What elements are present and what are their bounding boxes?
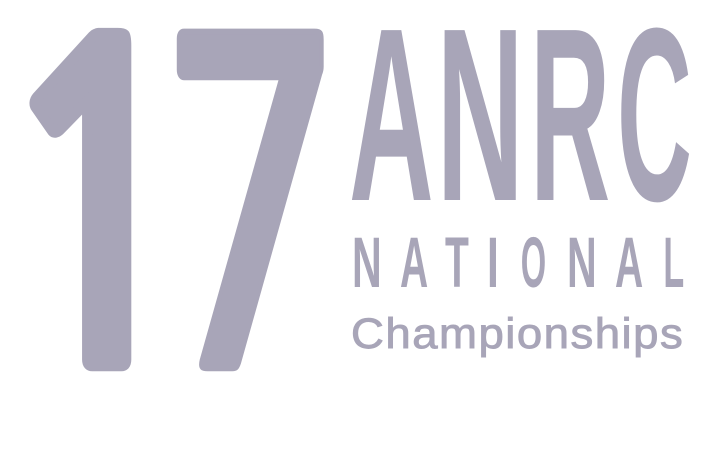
- numeral 17: [0, 0, 344, 433]
- heading: NATIONAL: N: [352, 223, 382, 303]
- heading: NATIONAL: I: [487, 224, 499, 303]
- heading: ANRC: [349, 0, 692, 253]
- heading: NATIONAL: N: [567, 223, 597, 303]
- heading: NATIONAL: L: [663, 223, 684, 302]
- heading: NATIONAL: A: [400, 224, 428, 303]
- heading: NATIONAL: O: [521, 223, 546, 302]
- heading: NATIONAL: T: [445, 224, 469, 303]
- numeral 17: 7: [159, 0, 344, 433]
- heading: NATIONAL: A: [615, 224, 643, 303]
- subheading: Championships: Championships: [351, 310, 683, 358]
- heading: NATIONAL: [352, 223, 684, 303]
